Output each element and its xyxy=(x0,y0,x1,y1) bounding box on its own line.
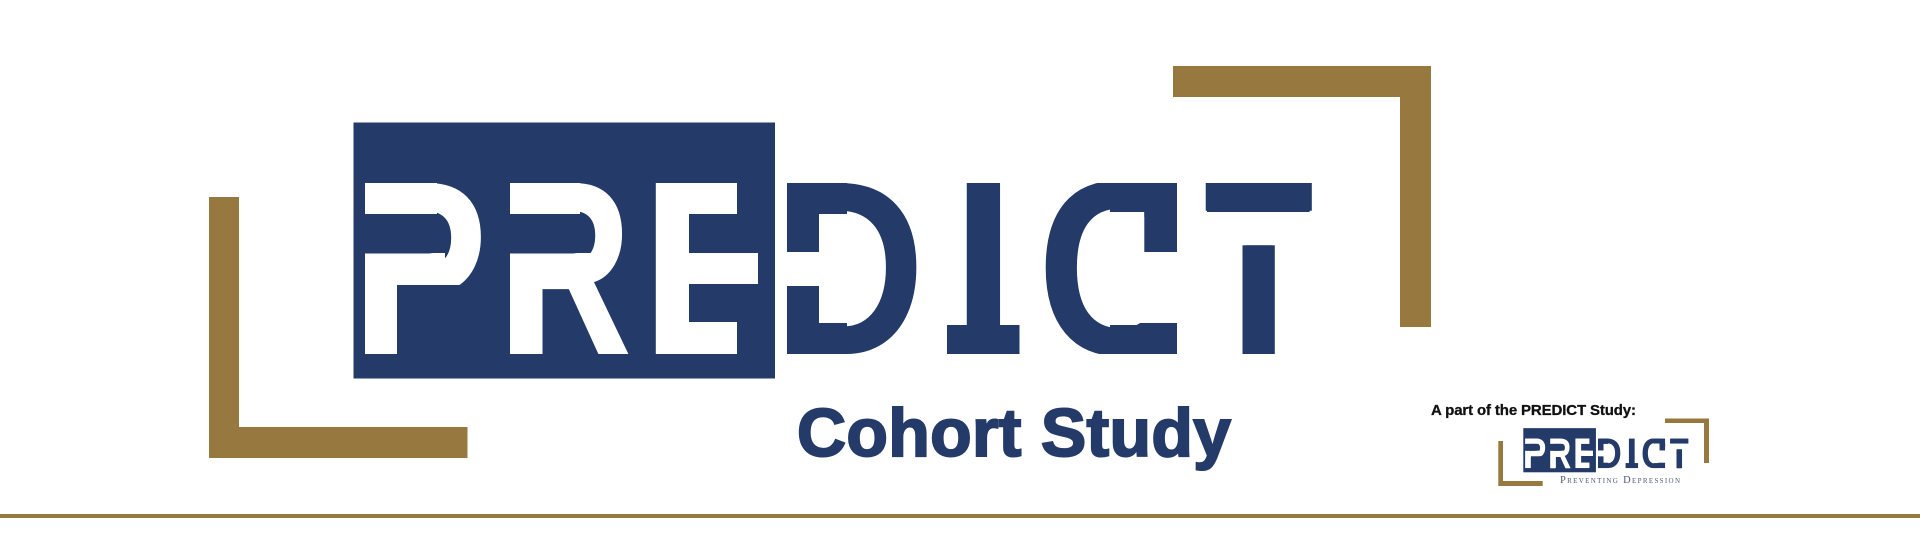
small PREDICT logo xyxy=(1498,418,1709,486)
letter D: D xyxy=(774,129,925,407)
small wordmark: P xyxy=(1523,430,1546,478)
letter C: C xyxy=(1037,130,1192,407)
gold bracket: top right xyxy=(1173,66,1431,327)
gold bracket: bottom left xyxy=(209,197,468,458)
gold footer rule xyxy=(0,514,1920,518)
letter I: I xyxy=(951,129,1016,407)
small wordmark: T xyxy=(1670,429,1689,477)
letter T: T xyxy=(1204,130,1314,407)
small wordmark xyxy=(1523,428,1689,478)
small wordmark: R xyxy=(1548,431,1571,478)
caption: part of the study: A part of the PREDICT Study: xyxy=(1431,402,1636,419)
small bracket: bottom left xyxy=(1498,441,1543,486)
small wordmark: E xyxy=(1574,430,1591,478)
letter R: R xyxy=(498,131,632,407)
small wordmark: D xyxy=(1596,430,1622,478)
tagline: Preventing Depression: Preventing Depression xyxy=(1560,475,1680,486)
letter E: E xyxy=(646,130,744,408)
small wordmark: I xyxy=(1626,430,1637,477)
small bracket: top right xyxy=(1665,418,1709,463)
main PREDICT logo wordmark xyxy=(351,122,1314,408)
small wordmark: C xyxy=(1641,431,1668,478)
subtitle: Cohort Study: Cohort Study xyxy=(797,395,1231,471)
letter P: P xyxy=(351,130,488,407)
